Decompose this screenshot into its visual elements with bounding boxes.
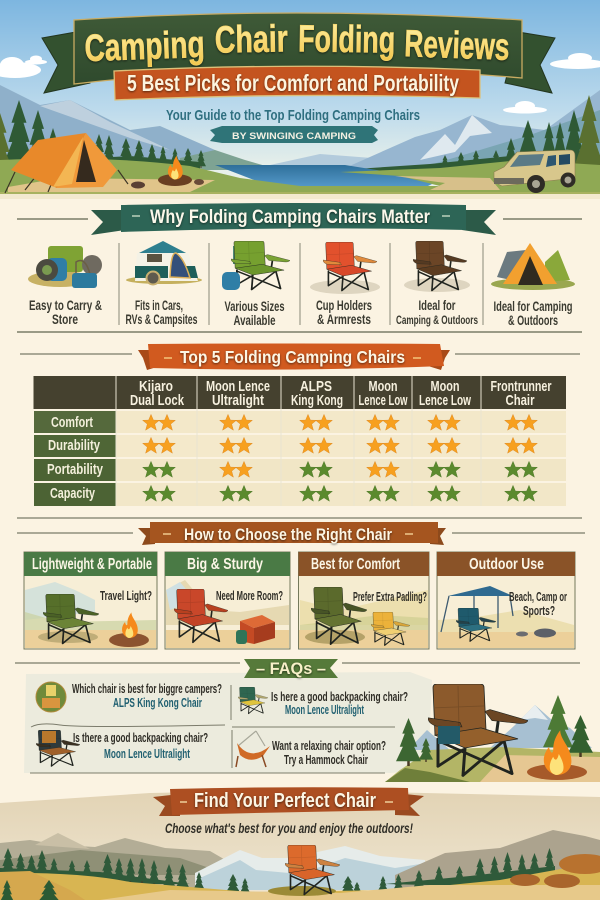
scene: large chair and campfire xyxy=(385,684,600,782)
icon: orange tent xyxy=(491,243,575,290)
footer tagline: Choose what's best for you and enjoy the outdoors! xyxy=(165,820,413,836)
main title text: Folding xyxy=(298,18,395,62)
section banner: why xyxy=(91,203,496,235)
card: big and sturdy: Need More Room? xyxy=(216,589,283,603)
benefit labels: & Armrests xyxy=(317,311,371,327)
FAQ 4: Want a relaxing chair option? xyxy=(272,739,386,753)
card: big and sturdy xyxy=(165,552,290,649)
banner tails xyxy=(42,32,555,93)
section banner: top 5: Top 5 Folding Camping Chairs xyxy=(180,347,405,367)
benefit labels: Various Sizes xyxy=(224,298,285,314)
benefit labels: Fits in Cars, xyxy=(135,297,183,313)
table header: Moon Lence xyxy=(206,378,270,395)
icon: camper trailer xyxy=(126,241,202,284)
row: durability: Durability xyxy=(48,438,100,454)
main title text: Camping xyxy=(84,24,205,70)
table header: ALPS xyxy=(300,378,332,395)
footer chair xyxy=(268,845,340,896)
comparison table xyxy=(34,376,566,506)
card: outdoor use: Sports? xyxy=(523,604,555,618)
section banner: how to choose xyxy=(138,522,446,545)
panel: FAQ xyxy=(24,672,432,773)
card: best for comfort: Best for Comfort xyxy=(311,556,400,573)
main title text xyxy=(84,18,510,70)
table header: Lence Low xyxy=(358,392,408,409)
card: best for comfort xyxy=(298,552,429,649)
section banner: why: Why Folding Camping Chairs Matter xyxy=(150,207,431,228)
benefit labels: RVs & Campsites xyxy=(126,311,198,327)
card: big and sturdy: Big & Sturdy xyxy=(187,556,263,573)
FAQ 1 xyxy=(36,682,222,712)
table header xyxy=(34,376,566,409)
row: portability xyxy=(34,459,566,481)
byline ribbon xyxy=(210,126,378,143)
table header: Dual Lock xyxy=(130,392,184,409)
subtitle plate xyxy=(114,66,480,100)
icon: brown chair xyxy=(404,241,470,292)
FAQ 3: Moon Lence Ultralight xyxy=(104,747,191,761)
table header: Chair xyxy=(506,392,535,409)
footer mountains and meadow xyxy=(0,830,600,900)
byline ribbon: BY SWINGING CAMPING xyxy=(232,131,356,142)
icon: red chair xyxy=(310,242,380,294)
table header: King Kong xyxy=(291,392,343,409)
row: portability: Portability xyxy=(47,462,103,478)
subtitle plate: 5 Best Picks for Comfort and Portability xyxy=(127,70,459,96)
FAQ 1: Which chair is best for biggre campers? xyxy=(72,682,222,696)
table header: Frontrunner xyxy=(490,378,552,395)
card: lightweight and portable: Lightweight & Portable xyxy=(32,556,152,573)
icon: hero campfire xyxy=(131,156,204,188)
FAQ 2 xyxy=(238,687,408,717)
benefit labels: Cup Holders xyxy=(316,297,372,313)
banner main xyxy=(74,13,522,84)
title banner xyxy=(42,13,555,100)
benefit labels: Easy to Carry & xyxy=(29,297,102,313)
card: lightweight and portable: Travel Light? xyxy=(100,589,152,603)
card: best for comfort: Prefer Extra Padling? xyxy=(353,590,427,604)
benefit labels: Ideal for xyxy=(418,297,456,313)
section banner: find your chair: Find Your Perfect Chair xyxy=(194,790,376,812)
FAQ 3: Is there a good backpacking chair? xyxy=(73,731,208,745)
section banner: top 5 xyxy=(138,344,450,370)
main title text: Reviews xyxy=(404,23,510,69)
benefit labels: Camping & Outdoors xyxy=(396,313,478,327)
main title text: Chair xyxy=(214,18,288,62)
card: lightweight and portable xyxy=(24,552,157,649)
FAQ 1: ALPS King Kong Chair xyxy=(113,696,202,710)
icon: hero tent xyxy=(5,133,128,193)
row: durability xyxy=(34,435,566,457)
table header: Moon xyxy=(368,378,398,395)
row: capacity xyxy=(34,483,566,506)
benefit labels: Available xyxy=(234,312,276,328)
row: capacity: Capacity xyxy=(50,486,95,502)
FAQ 2: Moon Lence Ultralight xyxy=(285,703,365,717)
benefit labels xyxy=(29,297,572,328)
table header: Moon xyxy=(430,378,460,395)
icon: bags xyxy=(28,246,102,288)
row: comfort: Comfort xyxy=(51,415,93,431)
table header: Kijaro xyxy=(139,378,173,395)
table header: Ultralight xyxy=(212,392,264,409)
hero landscape xyxy=(0,0,600,199)
benefit labels: Store xyxy=(52,311,78,327)
card: outdoor use: Outdoor Use xyxy=(469,556,544,573)
benefit labels: & Outdoors xyxy=(508,312,558,328)
section banner: how to choose: How to Choose the Right Chair xyxy=(184,525,392,544)
row: comfort xyxy=(34,411,566,433)
table header: Lence Low xyxy=(419,392,471,409)
FAQ 4 xyxy=(236,731,386,767)
card: outdoor use xyxy=(437,552,575,649)
tagline: Your Guide to the Top Folding Camping Chairs xyxy=(166,107,420,124)
icon: green chair with backpack xyxy=(222,241,290,290)
icon: hero SUV xyxy=(494,150,576,193)
footer background xyxy=(0,790,600,900)
section banner: FAQs: – FAQs – xyxy=(256,659,326,678)
FAQ 2: Is here a good backpacking chair? xyxy=(271,690,408,704)
FAQ 4: Try a Hammock Chair xyxy=(284,753,368,767)
FAQ 3 xyxy=(36,730,208,766)
section banner: find your chair xyxy=(153,787,424,816)
